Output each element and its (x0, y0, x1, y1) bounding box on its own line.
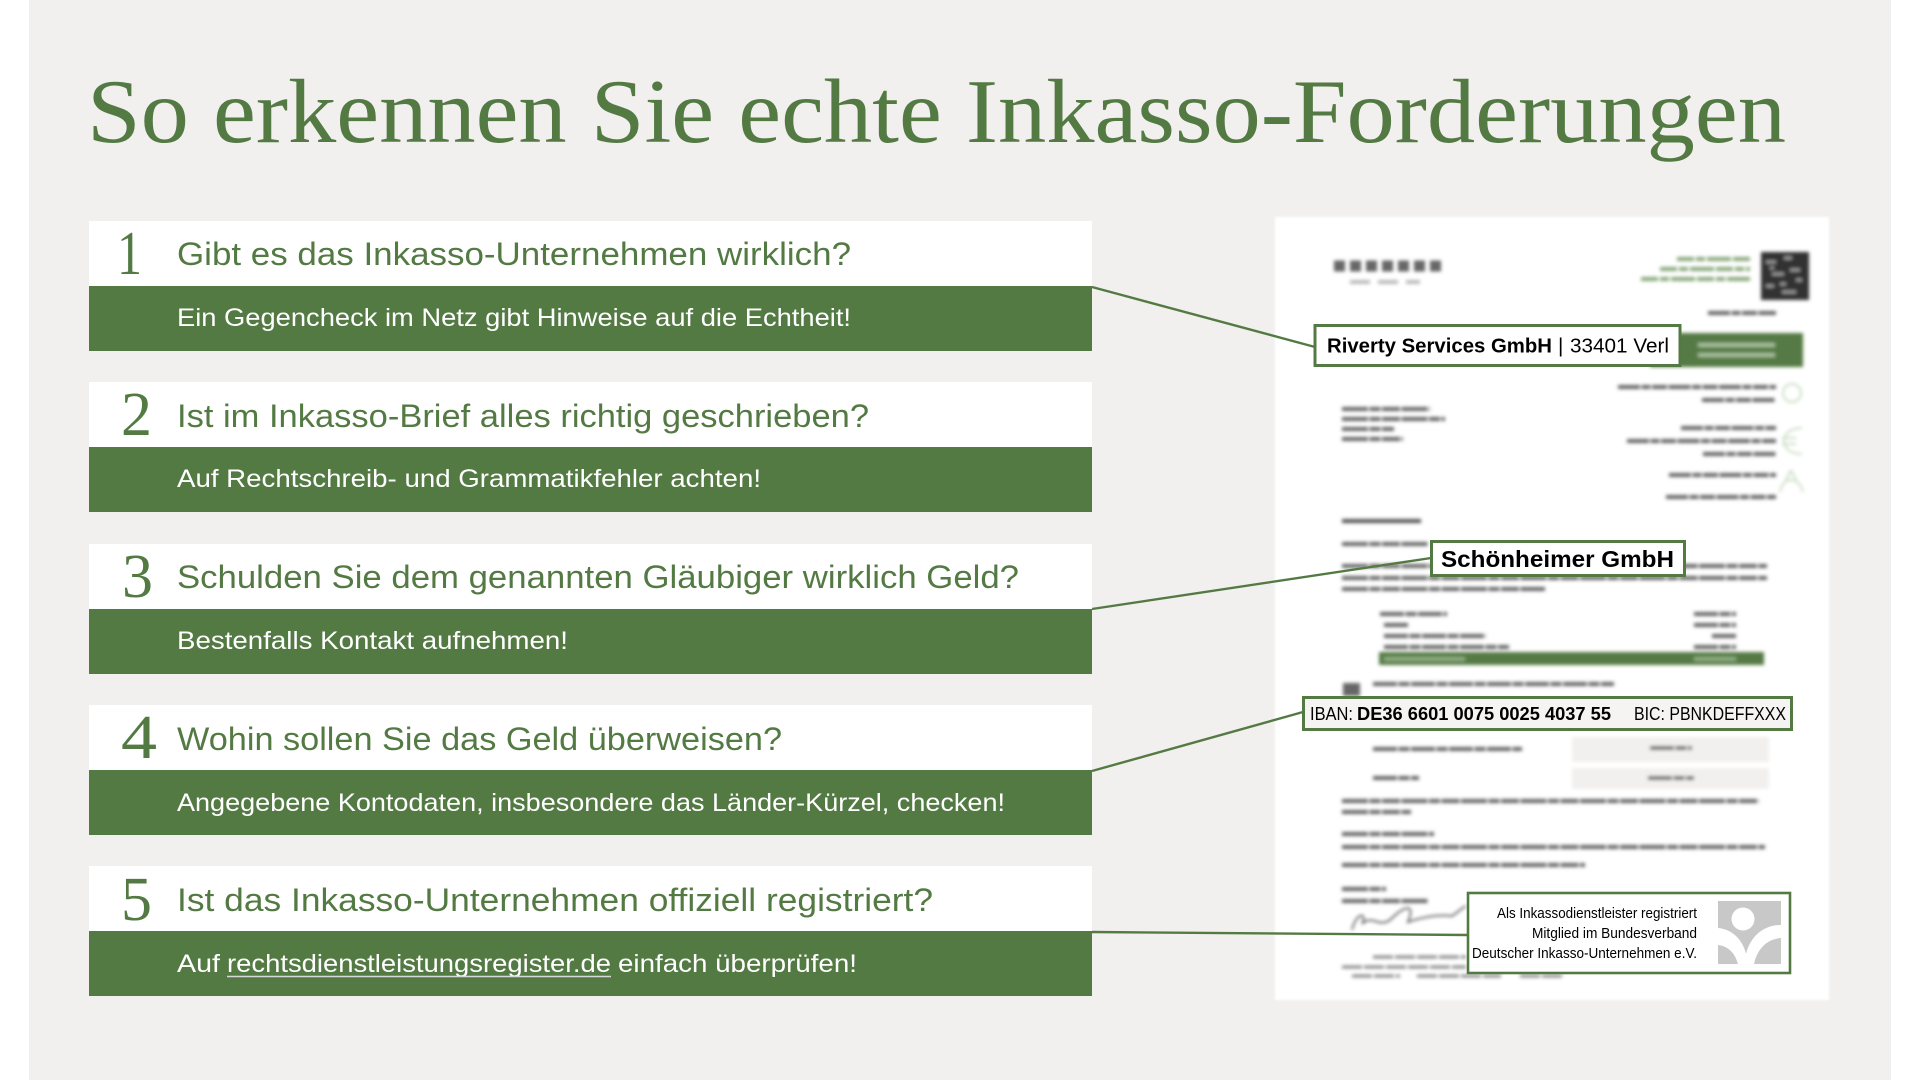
panel: step 1 (89, 220, 1092, 351)
number 2: 2 (121, 381, 152, 449)
number 3: 3 (122, 543, 153, 611)
heading 4: Wohin sollen Sie das Geld überweisen? (177, 721, 782, 757)
callout: association membership (1468, 893, 1790, 973)
text 2: Auf Rechtschreib- und Grammatikfehler achten! (177, 465, 761, 493)
blurred QR code (1761, 252, 1809, 300)
blurred footer (1342, 957, 1562, 976)
number 5: 5 (121, 866, 152, 934)
blurred payment boxes (1572, 737, 1769, 762)
callout: company address: Riverty Services GmbH (1327, 334, 1552, 358)
connector line 4 (1092, 712, 1303, 771)
text 5: einfach überprüfen! (618, 950, 857, 978)
blurred closing text (1342, 801, 1765, 901)
connector line 1 (1092, 287, 1315, 347)
heading 5: Ist das Inkasso-Unternehmen offiziell registriert? (177, 882, 933, 918)
membership text: Mitglied im Bundesverband (1532, 926, 1697, 942)
text 3: Bestenfalls Kontakt aufnehmen! (177, 627, 568, 655)
heading 3: Schulden Sie dem genannten Gläubiger wirklich Geld? (177, 559, 1019, 595)
text 5: rechtsdienstleistungsregister.de (227, 950, 611, 978)
document sheet: blurred letter (1275, 217, 1829, 1000)
callout: creditor (1432, 542, 1684, 576)
callout: bank details: DE36 6601 0075 0025 4037 55 (1357, 703, 1611, 724)
blurred icons (1780, 384, 1803, 492)
callout: creditor: Schönheimer GmbH (1441, 546, 1674, 572)
callout: bank details: IBAN: (1310, 703, 1353, 724)
callout: bank details (1304, 698, 1792, 730)
number 4: 4 (121, 704, 157, 772)
blurred address and body lines (1342, 409, 1767, 589)
blurred payment hint (1343, 683, 1360, 696)
connector line 5 (1092, 932, 1468, 935)
callout: company address: | (1558, 334, 1563, 358)
connector line 3 (1092, 558, 1431, 609)
membership text: Als Inkassodienstleister registriert (1497, 906, 1697, 922)
blurred logo (1334, 266, 1442, 282)
panel: step 3 (89, 543, 1092, 674)
callout: company address (1315, 326, 1680, 366)
panel: step 5 (89, 866, 1092, 996)
icon: association logo (1718, 901, 1781, 964)
blurred signature (1352, 906, 1466, 930)
number 1: 1 (117, 220, 142, 288)
blurred sender and payment lines (1618, 313, 1776, 497)
text 5 (177, 950, 857, 978)
blurred green contact lines (1641, 259, 1750, 279)
text 5: Auf (177, 950, 220, 978)
callout: bank details: BIC: PBNKDEFFXXX (1634, 703, 1786, 724)
blurred claim table (1380, 614, 1736, 647)
title: So erkennen Sie echte Inkasso-Forderungen (87, 61, 1786, 162)
panel: step 4 (89, 704, 1092, 835)
heading 2: Ist im Inkasso-Brief alles richtig geschrieben? (177, 398, 869, 434)
heading 1: Gibt es das Inkasso-Unternehmen wirklich? (177, 236, 851, 272)
text 1: Ein Gegencheck im Netz gibt Hinweise auf die Echtheit! (177, 304, 851, 332)
panel: step 2 (89, 381, 1092, 512)
blurred green box (1650, 333, 1803, 367)
callout: company address: 33401 Verl (1570, 334, 1669, 358)
membership text (1472, 906, 1697, 962)
text 4: Angegebene Kontodaten, insbesondere das Länder-Kürzel, checken! (177, 789, 1005, 817)
membership text: Deutscher Inkasso-Unternehmen e.V. (1472, 946, 1697, 962)
